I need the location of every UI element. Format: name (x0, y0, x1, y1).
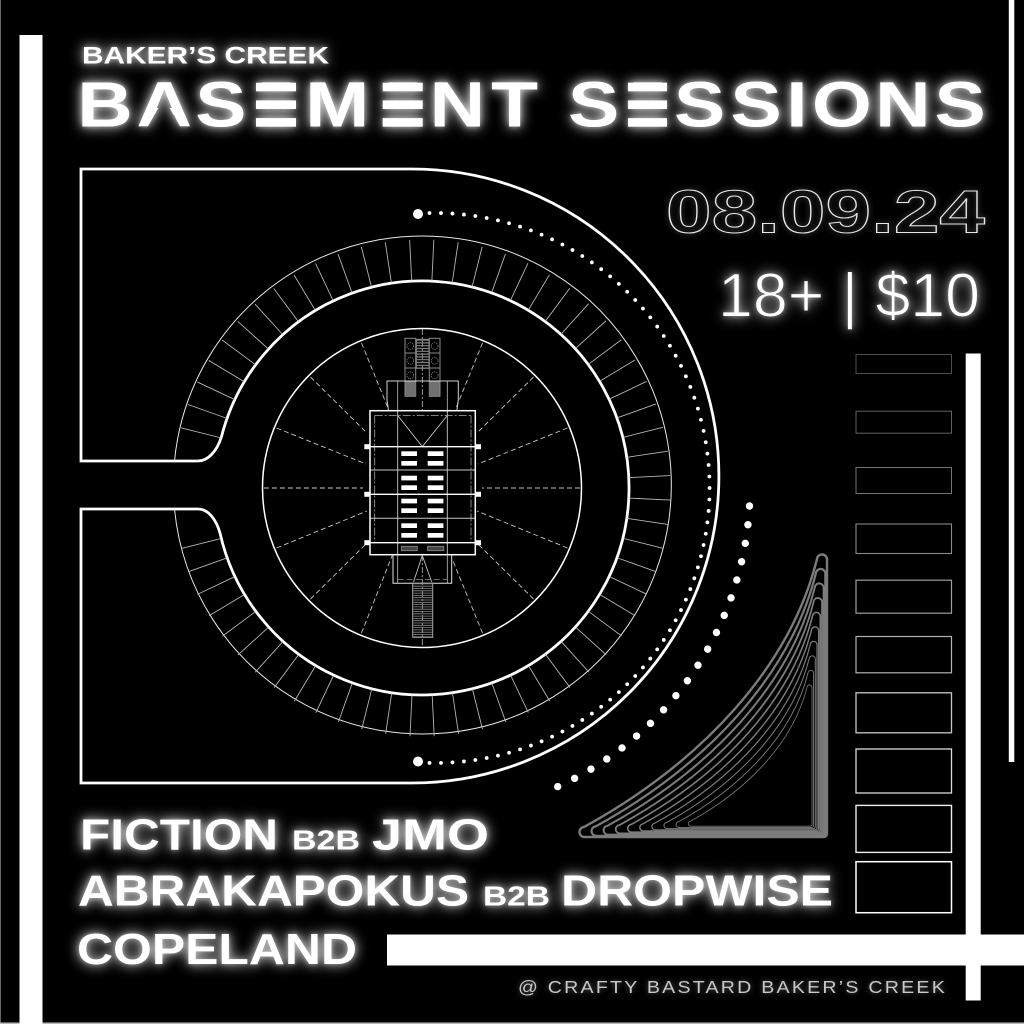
D-shaped outer outline with thick ring (81, 169, 719, 783)
lineup line 1 (80, 810, 489, 859)
lineup line 1: B2B (292, 824, 360, 855)
lineup line 1: JMO (372, 810, 489, 859)
lineup line 2: ABRAKAPOKUS (78, 866, 469, 915)
right vertical bar (966, 354, 981, 1000)
bottom annex (393, 555, 452, 583)
ring spokes (194, 260, 650, 716)
lineup line 1: FICTION (80, 810, 278, 859)
venue footer: @ CRAFTY BASTARD BAKER’S CREEK (518, 977, 947, 997)
centre axis (421, 329, 423, 647)
small grey vents (401, 546, 444, 551)
lineup line 2 (78, 866, 833, 915)
white seats (401, 451, 443, 538)
thin far-right vertical bar (1009, 0, 1014, 762)
central building plan (364, 329, 481, 647)
age and price: 18+ | $10 (718, 262, 980, 331)
small dotted arc with end dots (413, 209, 710, 766)
nested curved triangles (579, 554, 827, 837)
lineup (77, 810, 833, 974)
dashed radial lines (264, 343, 580, 633)
lineup line 3: COPELAND (77, 925, 357, 974)
side tabs (364, 444, 481, 545)
horizontal bottom bar (387, 934, 1024, 966)
main hall grid (398, 411, 447, 555)
subtitle: Baker's Creek: BAKER’S CREEK (82, 42, 330, 70)
top annex (387, 381, 458, 411)
entry stairs (413, 583, 433, 637)
lineup line 2: B2B (483, 880, 550, 911)
date outline text: 08.09.24 (666, 179, 986, 246)
fading rectangle column (856, 354, 952, 913)
thin outer ring (174, 236, 671, 734)
large dotted arc (557, 506, 750, 787)
inner circle (262, 328, 582, 648)
title: Basement Sessions: BASEMENT SESSIONS (77, 69, 986, 140)
top tower (405, 338, 440, 396)
lineup line 2: DROPWISE (561, 866, 833, 915)
left vertical bar (20, 35, 42, 1024)
